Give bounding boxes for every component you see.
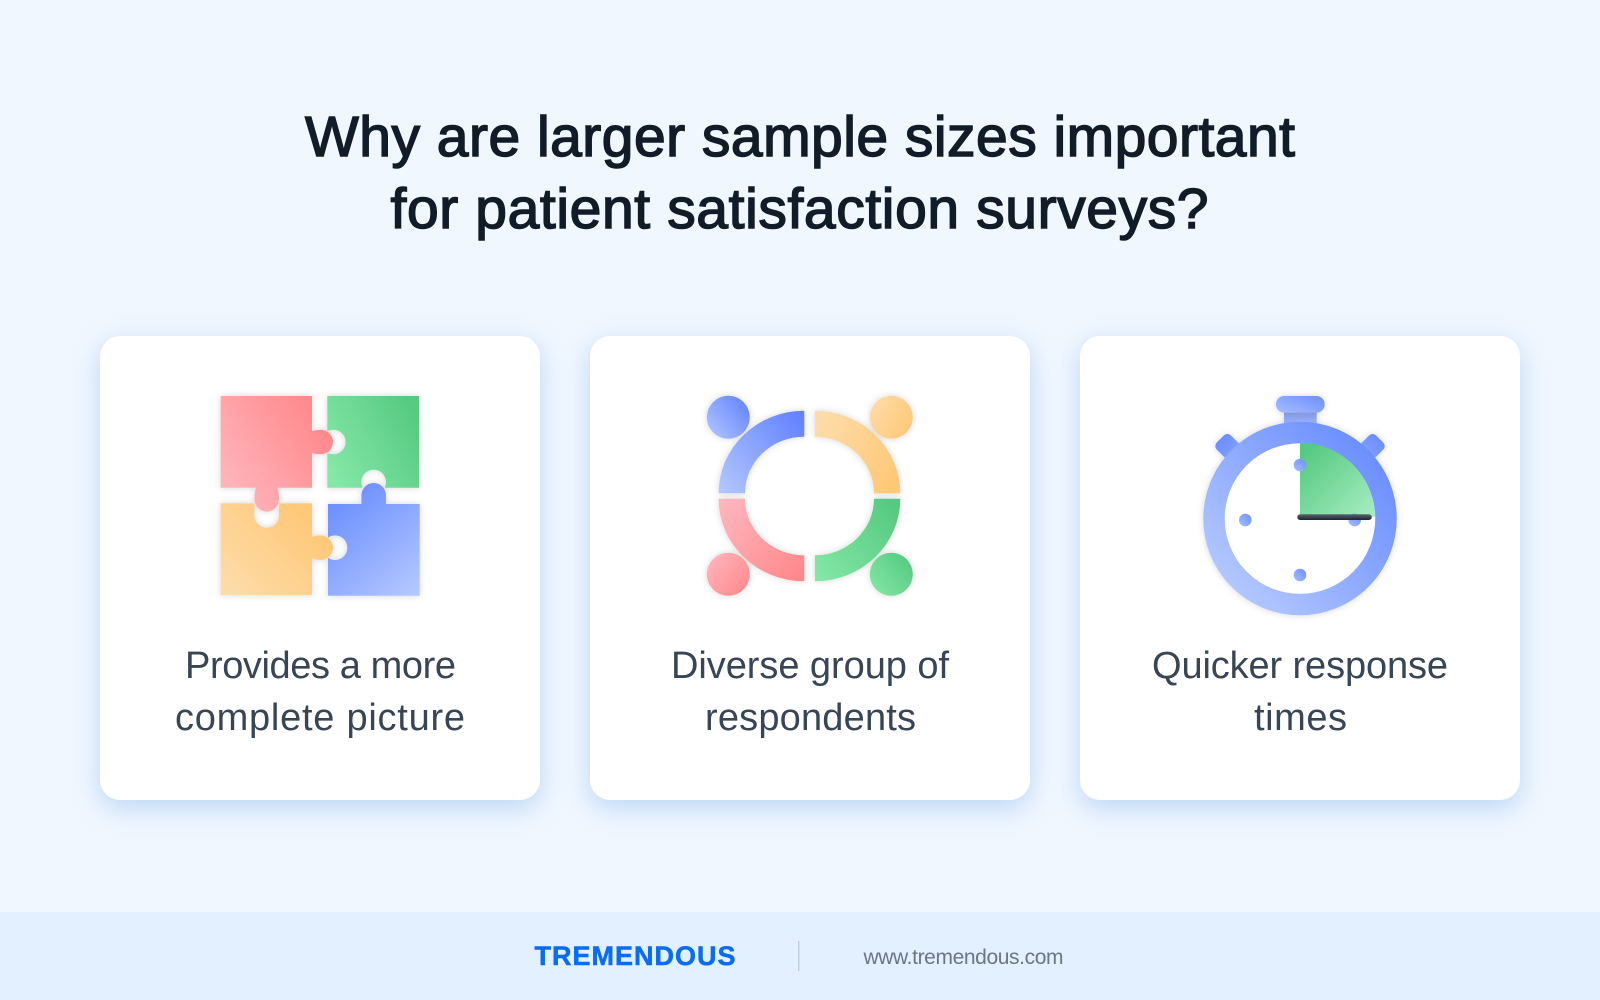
logo: tremendous wordmark: TREMENDOUS xyxy=(534,941,736,971)
panel: quicker response times xyxy=(1080,336,1520,800)
icon: four people around a circle xyxy=(707,396,913,596)
label: provides a more complete picture: complete picture xyxy=(175,697,465,739)
title: for patient satisfaction surveys? xyxy=(390,177,1208,241)
label: diverse group of respondents: respondents xyxy=(705,697,916,739)
panel: diverse group of respondents xyxy=(590,336,1030,800)
label: quicker response times xyxy=(1152,645,1448,739)
panel: provides a more complete picture xyxy=(100,336,540,800)
website url: www.tremendous.com xyxy=(862,946,1064,969)
label: quicker response times: times xyxy=(1254,697,1347,739)
label: quicker response times: Quicker response xyxy=(1152,645,1448,687)
title: Why are larger sample sizes important xyxy=(305,105,1295,169)
label: diverse group of respondents xyxy=(671,645,949,739)
label: diverse group of respondents: Diverse group of xyxy=(671,645,949,687)
footer bar xyxy=(0,912,1600,1000)
title xyxy=(304,105,1296,241)
label: provides a more complete picture: Provides a more xyxy=(185,645,456,687)
icon: stopwatch xyxy=(1213,396,1387,604)
label: provides a more complete picture xyxy=(175,645,465,739)
icon: four puzzle pieces xyxy=(221,396,420,596)
